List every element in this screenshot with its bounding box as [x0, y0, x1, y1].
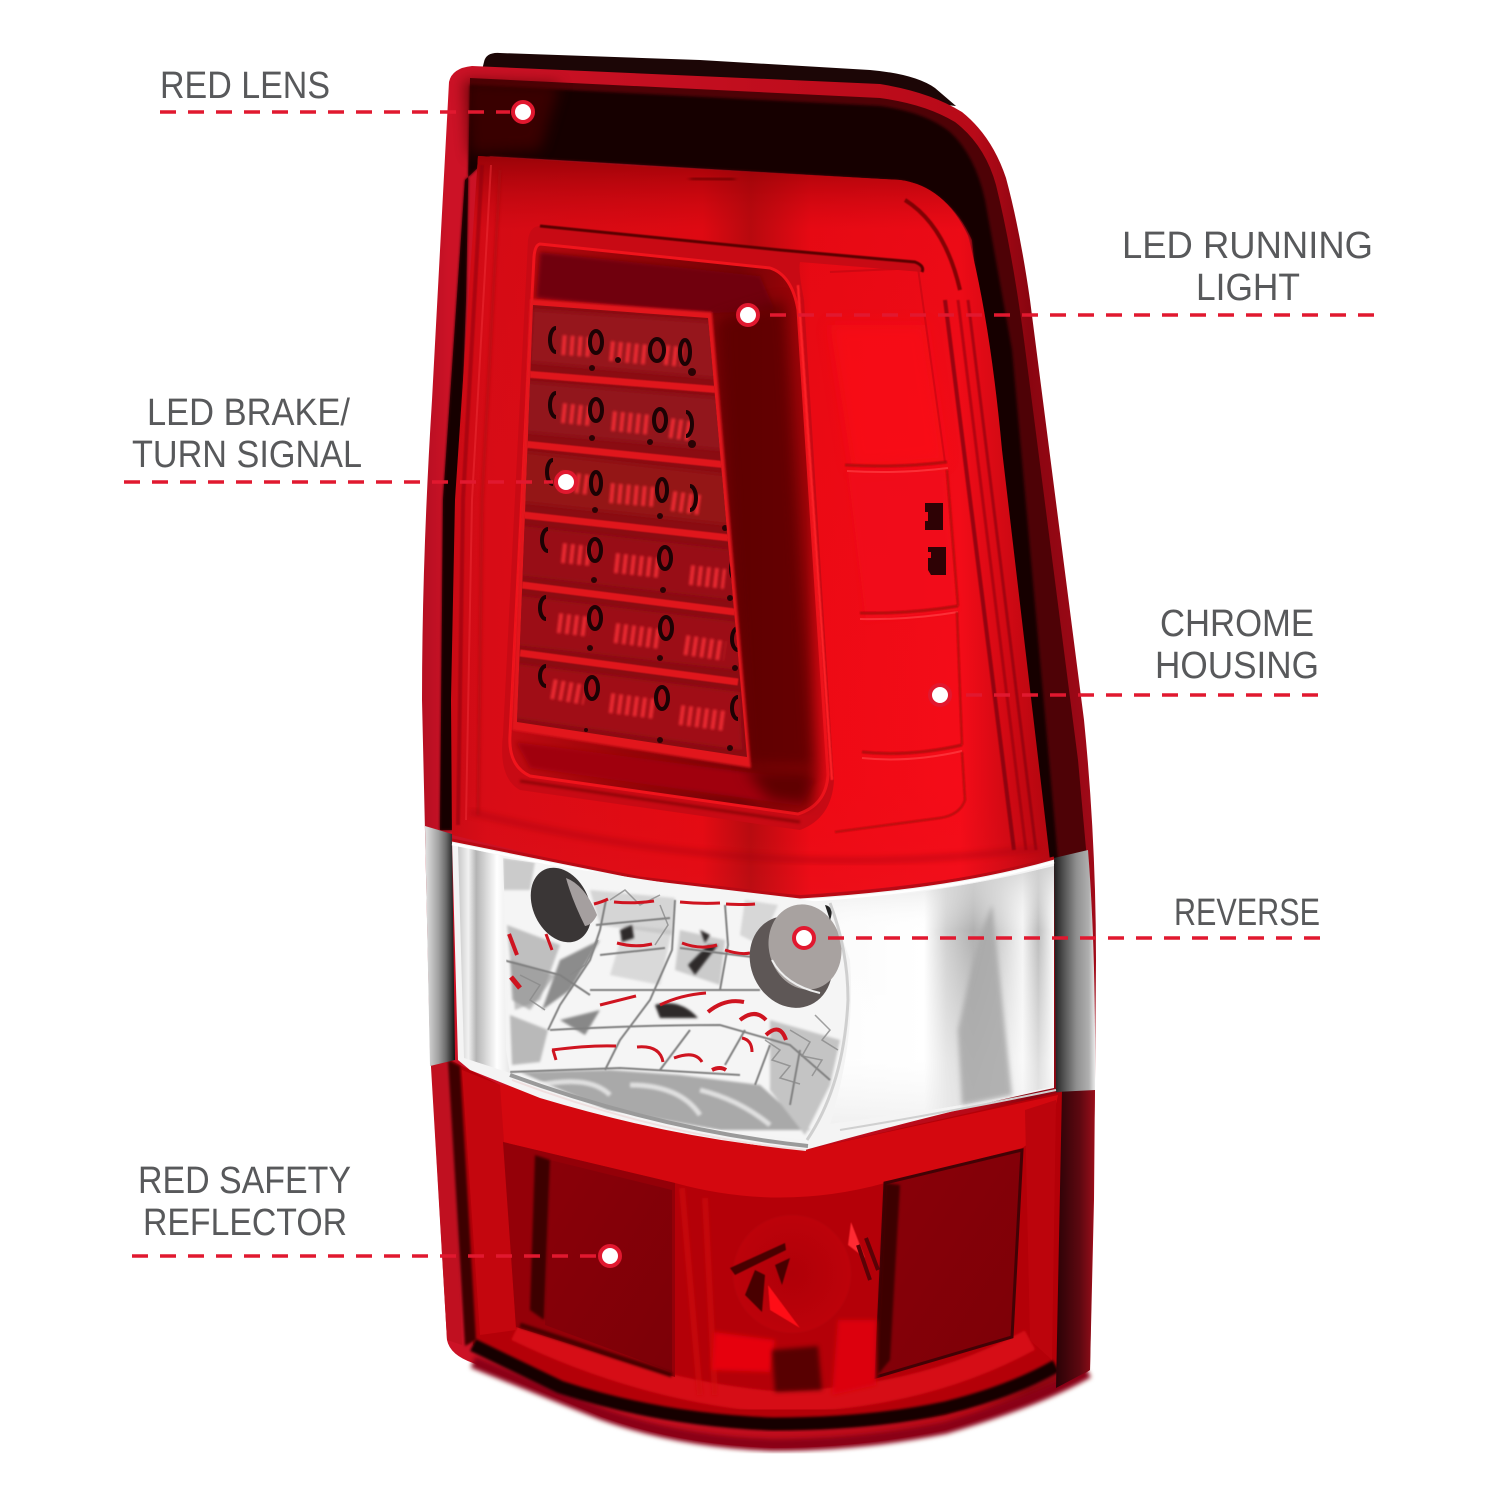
callout: chrome housing [930, 603, 1319, 705]
lower lens panel lines [682, 1188, 715, 1395]
crinkled reflector texture [520, 890, 838, 1084]
left safety reflector [503, 1142, 675, 1377]
callout: LED running light [738, 225, 1374, 325]
callout: chrome housing: HOUSING [1155, 645, 1319, 687]
drain circle [712, 1214, 878, 1395]
bowl marbling [540, 1082, 770, 1125]
dark upper lens band [440, 78, 1087, 860]
callout: red lens: RED LENS [160, 65, 330, 107]
LED reflector highlights [552, 345, 725, 721]
bottom rim [431, 1060, 1095, 1445]
LED row shading [515, 310, 742, 750]
callout: LED brake and turn signal: LED BRAKE/ [147, 392, 350, 434]
LED row separators [520, 374, 738, 682]
callout: LED running light: LED RUNNING [1122, 225, 1373, 267]
dark reflections [620, 925, 718, 1018]
right bulb socket [750, 904, 842, 1008]
infographic: tail light anatomy [124, 52, 1374, 1454]
callout: red safety reflector: REFLECTOR [143, 1202, 347, 1244]
facet lines [503, 900, 830, 1105]
LED specks [584, 357, 738, 751]
upper bright band of lower lens [480, 1080, 1058, 1198]
callout: LED brake and turn signal [124, 392, 576, 492]
right side clear band [1054, 850, 1095, 1092]
left bulb socket [530, 868, 597, 942]
facets [503, 858, 840, 1135]
outer red shell [422, 66, 1096, 1448]
LED brake and turn signal array [512, 299, 751, 768]
callout: red safety reflector [132, 1160, 620, 1266]
dark top housing edge [480, 53, 956, 106]
tail light assembly [422, 53, 1096, 1448]
right safety reflector [876, 1150, 1022, 1377]
callout: red lens [160, 65, 533, 122]
callout: chrome housing: CHROME [1160, 603, 1314, 645]
LED chips [540, 328, 738, 719]
right panels of running light housing [830, 268, 965, 832]
clear reverse lens with reflector facets [503, 858, 851, 1150]
callout: reverse: REVERSE [1174, 892, 1320, 934]
chrome reverse housing [452, 840, 1056, 1150]
red reflections [509, 899, 786, 1070]
callout: LED running light: LIGHT [1196, 267, 1300, 309]
upper red lens panel [451, 156, 1050, 895]
callout: red safety reflector: RED SAFETY [138, 1160, 351, 1202]
left side clear band [425, 826, 455, 1066]
callout: reverse [794, 892, 1320, 948]
lower red lens [450, 1060, 1062, 1430]
callout: LED brake and turn signal: TURN SIGNAL [132, 434, 362, 476]
LED running light tube [502, 226, 923, 830]
